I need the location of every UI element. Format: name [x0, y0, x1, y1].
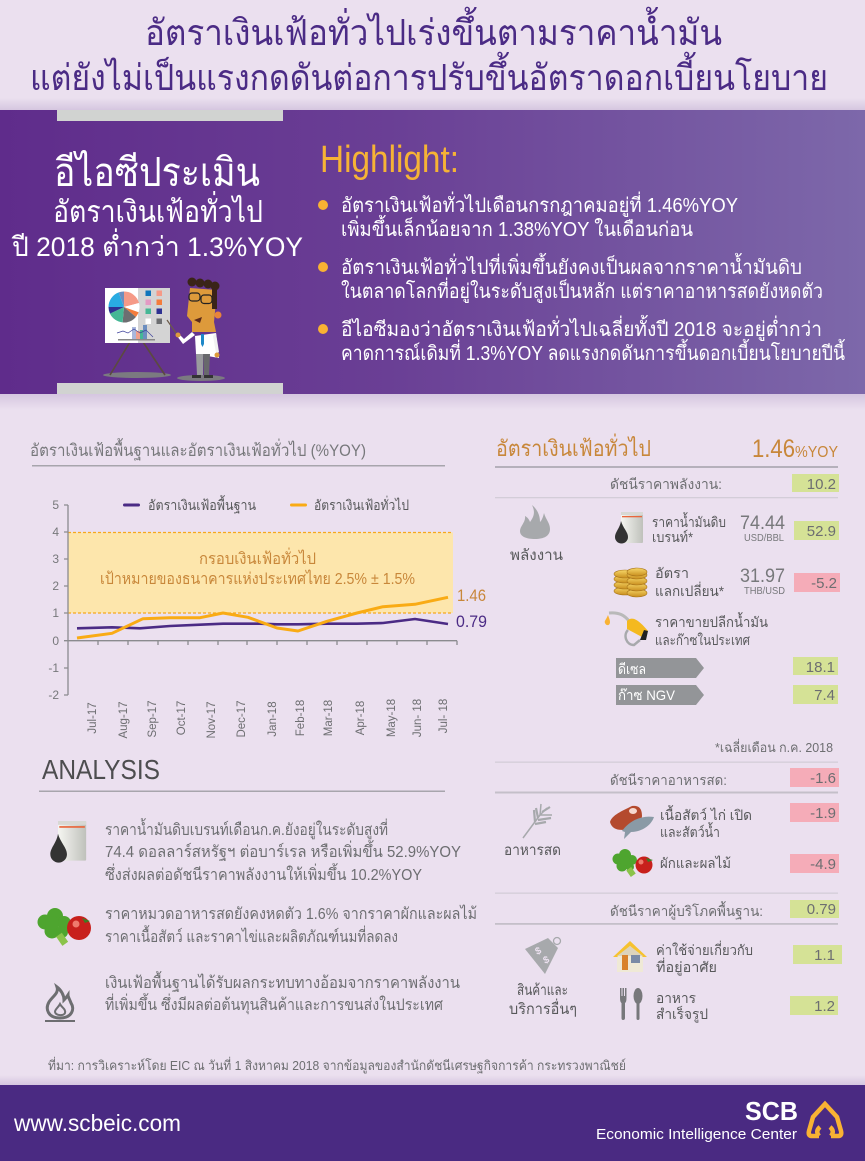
row: brent oil: ราคาน้ำมันดิบ: [652, 512, 726, 530]
icon: energy flame: [520, 505, 550, 539]
banner headline: [12, 150, 303, 262]
icon: price tags: $: [534, 945, 544, 958]
y axis labels: 5: [52, 498, 59, 512]
banner headline: อัตราเงินเฟ้อทั่วไป: [53, 191, 263, 229]
row: NGV: [616, 685, 838, 705]
value labels: 1.46: [457, 586, 486, 605]
value labels: [456, 586, 487, 631]
x axis labels: Jul-17: [87, 702, 99, 734]
y axis labels: 2: [52, 579, 59, 593]
highlight bullet 3: [318, 315, 845, 365]
legend: อัตราเงินเฟ้อพื้นฐาน: [148, 495, 256, 514]
row: vegetables and fruit: [660, 854, 839, 873]
icon: house: [613, 941, 647, 972]
x axis labels: [87, 699, 450, 739]
fresh food index row: [610, 768, 839, 788]
target band: เป้าหมายของธนาคารแห่งประเทศไทย 2.5% ± 1.5%: [100, 569, 415, 588]
banner headline: อีไอซีประเมิน: [54, 150, 260, 195]
x axis labels: Jun- 18: [412, 699, 424, 737]
y axis labels: -2: [48, 688, 59, 702]
breakdown heading: %YOY: [795, 444, 838, 461]
source note: ที่มา: การวิเคราะห์โดย EIC ณ วันที่ 1 สิงหาคม 2018 จากข้อมูลของสำนักดัชนีเศรษฐกิจการค้า กระทรวงพาณิชย์: [48, 1057, 626, 1074]
analysis text: core: เงินเฟ้อพื้นฐานได้รับผลกระทบทางอ้อมจากราคาพลังงาน: [105, 971, 460, 992]
row: diesel: 18.1: [806, 659, 835, 676]
row: NGV: 7.4: [814, 687, 835, 704]
row: prepared food: 1.2: [814, 998, 835, 1015]
icon: presenter with chart board: [103, 278, 225, 381]
x axis labels: Oct-17: [176, 701, 188, 735]
legend: อัตราเงินเฟ้อทั่วไป: [314, 496, 409, 513]
row: retail fuel: และก๊าซในประเทศ: [655, 632, 750, 648]
target band: กรอบเงินเฟ้อทั่วไป: [199, 547, 316, 568]
icon: flame outline: [45, 987, 75, 1022]
icon: coins: [614, 568, 647, 597]
panel: banner: [0, 110, 865, 394]
label: energy: พลังงาน: [510, 547, 563, 564]
fresh food index row: -1.6: [810, 770, 836, 787]
breakdown heading: [496, 433, 838, 463]
highlight bullet 1: [318, 191, 738, 241]
analysis text: oil: ซึ่งส่งผลต่อดัชนีราคาพลังงานให้เพิ่มขึ้น 10.2%YOY: [105, 863, 422, 884]
highlight bullet 1: อัตราเงินเฟ้อทั่วไปเดือนกรกฎาคมอยู่ที่ 1.46%YOY: [341, 191, 738, 218]
icon: vegetables: [38, 908, 91, 946]
core index row: [610, 900, 839, 920]
value labels: 0.79: [456, 612, 487, 631]
banner headline: ปี 2018 ต่ำกว่า 1.3%YOY: [12, 228, 303, 262]
row: exchange rate: -5.2: [811, 575, 837, 592]
energy index row: [610, 474, 839, 493]
heading: Highlight: Highlight:: [320, 139, 459, 181]
row: exchange rate: 31.97: [740, 566, 785, 587]
row: diesel: [616, 657, 838, 678]
y axis labels: 1: [52, 606, 59, 620]
title: อัตราเงินเฟ้อทั่วไปเร่งขึ้นตามราคาน้ำมัน: [145, 6, 722, 53]
x axis labels: Jan-18: [267, 701, 279, 737]
label: goods and services: บริการอื่นๆ: [509, 998, 577, 1018]
row: brent oil: 74.44: [740, 513, 785, 534]
row: meat: [660, 803, 839, 840]
analysis heading: ANALYSIS: [42, 754, 160, 785]
icon: fork and spoon: [620, 988, 642, 1020]
analysis text: oil: [105, 818, 461, 884]
logo text: [596, 1096, 798, 1143]
breakdown heading: อัตราเงินเฟ้อทั่วไป: [496, 433, 651, 461]
breakdown heading: 1.46: [752, 435, 795, 463]
analysis text: core: ที่เพิ่มขึ้น ซึ่งมีผลต่อต้นทุนสินค้าและการขนส่งในประเทศ: [105, 993, 443, 1015]
label: goods and services: สินค้าและ: [517, 982, 568, 999]
line: core inflation: [77, 619, 448, 628]
target band: [68, 532, 453, 613]
analysis text: oil: 74.4 ดอลลาร์สหรัฐฯ ต่อบาร์เรล หรือเพิ่มขึ้น 52.9%YOY: [105, 840, 461, 861]
highlight bullet 3: อีไอซีมองว่าอัตราเงินเฟ้อทั่วไปเฉลี่ยทั้งปี 2018 จะอยู่ต่ำกว่า: [341, 315, 822, 342]
title: [30, 6, 828, 98]
row: prepared food: อาหาร: [656, 990, 696, 1006]
website: www.scbeic.com: [13, 1110, 181, 1136]
x axis labels: Sep-17: [147, 700, 159, 738]
row: brent oil: USD/BBL: [744, 533, 784, 544]
row: housing: ค่าใช้จ่ายเกี่ยวกับ: [656, 941, 753, 958]
analysis text: food: ราคาหมวดอาหารสดยังคงหดตัว 1.6% จากราคาผักและผลไม้: [105, 904, 477, 923]
panel: analysis: [38, 754, 477, 1022]
icon: price tags: [525, 938, 560, 974]
icon: fuel nozzle: [605, 613, 648, 645]
row: prepared food: สำเร็จรูป: [656, 1005, 708, 1023]
row: diesel: ดีเซล: [618, 661, 646, 677]
analysis text: oil: ราคาน้ำมันดิบเบรนท์เดือนก.ค.ยังอยู่ในระดับสูงที่: [105, 818, 388, 840]
row: vegetables and fruit: -4.9: [810, 856, 836, 873]
x axis labels: Apr-18: [355, 701, 367, 735]
line: headline inflation: [77, 597, 448, 638]
row: retail fuel: [655, 612, 768, 648]
y axis labels: [48, 498, 59, 702]
analysis text: food: [105, 904, 477, 946]
row: exchange rate: อัตรา: [655, 565, 689, 581]
legend: [123, 495, 409, 514]
x axis labels: Feb-18: [295, 700, 307, 736]
core index row: ดัชนีราคาผู้บริโภคพื้นฐาน:: [610, 901, 763, 920]
core index row: 0.79: [807, 901, 836, 918]
x axis labels: Dec-17: [236, 700, 248, 738]
axes: [64, 505, 457, 695]
panel: line chart: [30, 438, 487, 739]
icon: price tags: $: [542, 954, 552, 967]
icon: wheat: [523, 804, 552, 838]
row: brent oil: [652, 512, 839, 545]
energy index row: ดัชนีราคาพลังงาน:: [610, 476, 722, 492]
highlight bullet 1: เพิ่มขึ้นเล็กน้อยจาก 1.38%YOY ในเดือนก่อน: [341, 215, 693, 241]
highlight bullet 2: อัตราเงินเฟ้อทั่วไปที่เพิ่มขึ้นยังคงเป็นผลจากราคาน้ำมันดิบ: [341, 253, 802, 279]
y axis labels: 3: [52, 552, 59, 566]
row: meat: -1.9: [810, 805, 836, 822]
row: NGV: ก๊าซ NGV: [618, 687, 676, 703]
footnote: *เฉลี่ยเดือน ก.ค. 2018: [715, 739, 833, 755]
row: exchange rate: [655, 565, 840, 599]
icon: SCB logo: [809, 1104, 841, 1136]
y axis labels: 4: [52, 525, 59, 539]
chart title: อัตราเงินเฟ้อพื้นฐานและอัตราเงินเฟ้อทั่วไป (%YOY): [30, 438, 366, 461]
label: goods and services: [509, 982, 577, 1018]
y axis labels: -1: [48, 661, 59, 675]
row: brent oil: เบรนท์*: [652, 529, 693, 545]
footer: [0, 1085, 865, 1161]
icon: vegetables: [612, 849, 653, 877]
x axis labels: Nov-17: [206, 701, 218, 739]
x axis labels: Aug-17: [118, 701, 130, 739]
fresh food index row: ดัชนีราคาอาหารสด:: [610, 772, 727, 788]
row: prepared food: [656, 990, 838, 1023]
row: housing: 1.1: [814, 947, 835, 964]
highlight bullet 2: [318, 253, 823, 304]
row: exchange rate: แลกเปลี่ยน*: [655, 582, 725, 599]
icon: oil tank: [50, 821, 86, 863]
row: housing: ที่อยู่อาศัย: [656, 958, 717, 976]
energy index row: 10.2: [807, 476, 836, 493]
row: housing: [656, 941, 842, 976]
row: exchange rate: THB/USD: [744, 586, 785, 597]
x axis labels: May-18: [386, 699, 398, 737]
x axis labels: Mar-18: [323, 700, 335, 736]
row: brent oil: 52.9: [807, 523, 836, 540]
row: retail fuel: ราคาขายปลีกน้ำมัน: [655, 612, 768, 630]
y axis labels: 0: [52, 634, 59, 648]
row: meat: เนื้อสัตว์ ไก่ เปิด: [660, 805, 752, 823]
logo text: Economic Intelligence Center: [596, 1126, 797, 1143]
label: fresh food: อาหารสด: [504, 842, 561, 859]
x axis labels: Jul- 18: [438, 699, 450, 733]
icon: meat and fish: [610, 806, 654, 839]
panel: headline inflation breakdown: [495, 433, 842, 1023]
analysis text: food: ราคาเนื้อสัตว์ และราคาไข่และผลิตภัณฑ์นมที่ลดลง: [105, 925, 398, 946]
logo text: SCB: [745, 1096, 798, 1126]
analysis text: core: [105, 971, 460, 1015]
icon: oil tank: [615, 512, 643, 544]
row: meat: และสัตว์น้ำ: [660, 822, 720, 840]
row: vegetables and fruit: ผักและผลไม้: [660, 855, 731, 871]
